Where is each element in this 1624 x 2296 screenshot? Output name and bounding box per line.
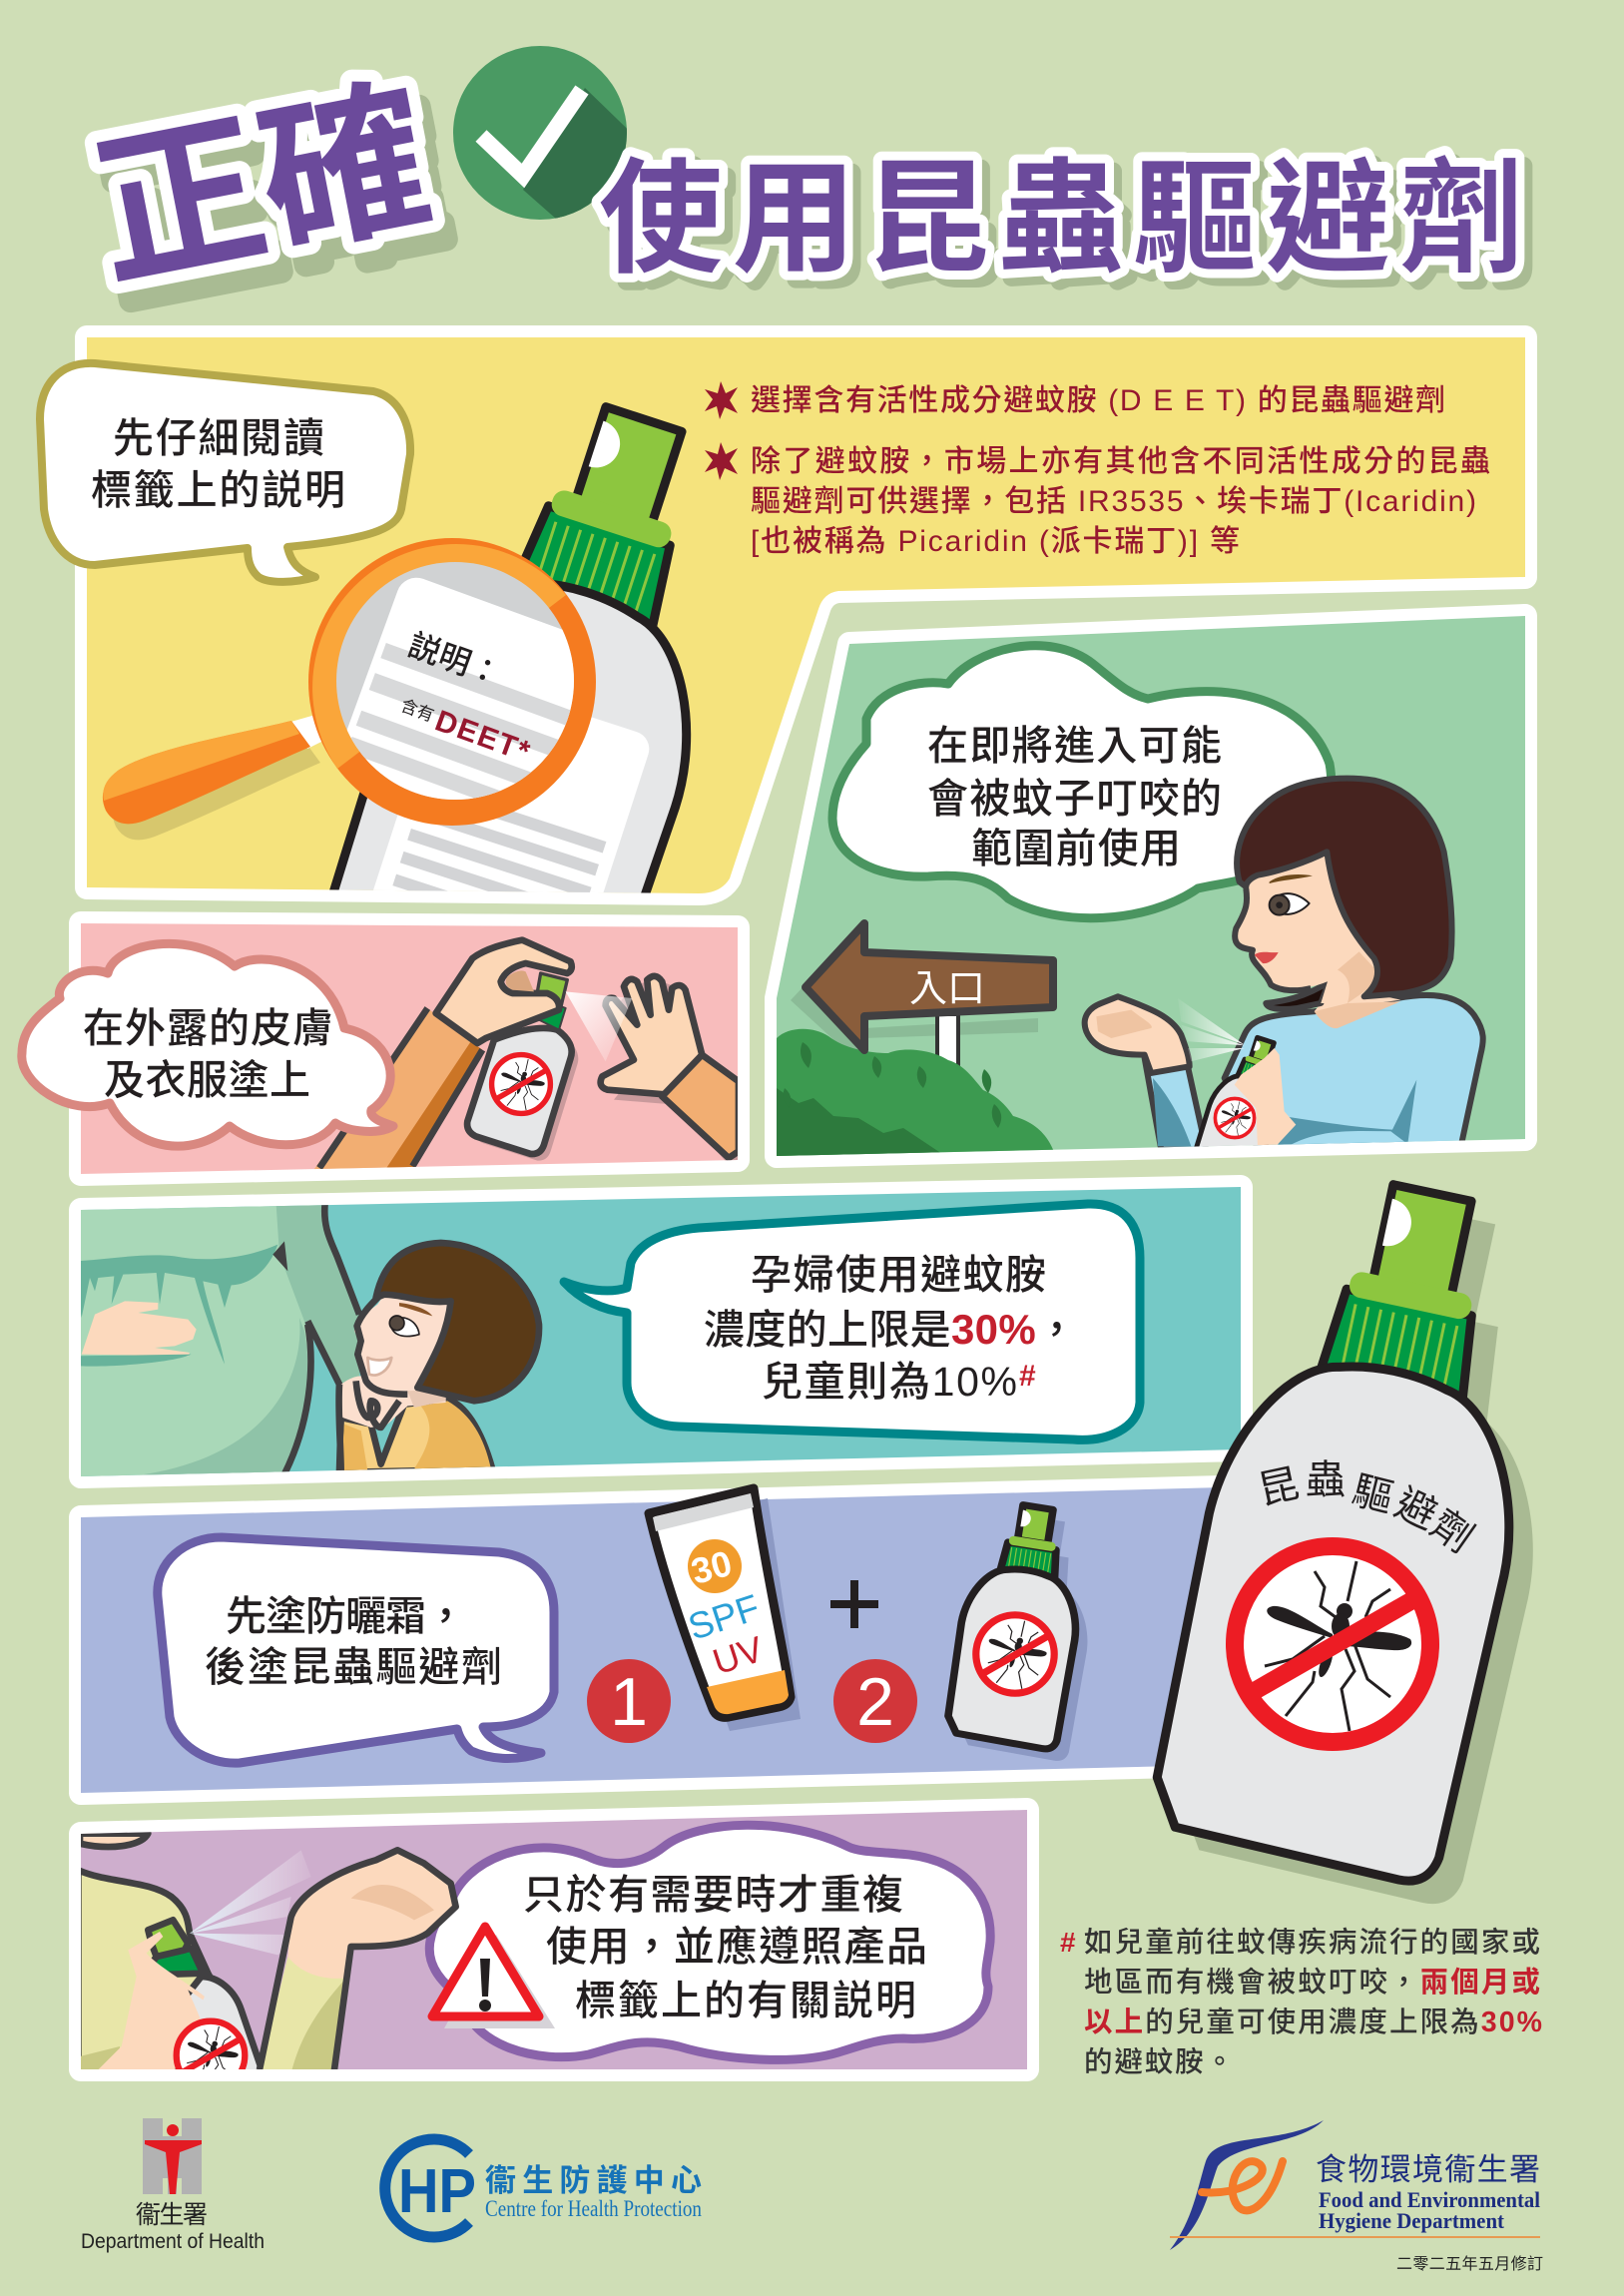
callout: use before entering: 在即將進入可能 — [927, 723, 1222, 769]
icon: large repellent bottle — [1143, 1161, 1603, 1911]
icon: plus sign — [830, 1580, 878, 1628]
icon: sunscreen tube: SPF — [684, 1586, 765, 1648]
logo: Food and Environmental Hygiene Department — [1170, 2120, 1540, 2250]
illustration: pregnant woman and child — [75, 1203, 539, 1477]
title: 使用昆蟲驅避劑: 使用昆蟲驅避劑 — [607, 159, 1531, 296]
illustration: entrance sign and bush — [777, 923, 1056, 1158]
callout: sunscreen first: 先塗防曬霜， — [226, 1593, 466, 1639]
label: bottle name: 蟲 — [1306, 1458, 1346, 1502]
badge: step 2 — [833, 1659, 917, 1743]
logo: Food and Environmental Hygiene Department: 食物環境衞生署 — [1316, 2152, 1540, 2187]
text block: active ingredients: 驅避劑可供選擇，包括 IR3535、埃卡瑞丁(Icaridin) — [751, 485, 1476, 518]
icon: sunscreen tube — [649, 1488, 801, 1731]
label: bottle name: 驅 — [1348, 1468, 1397, 1521]
label: 説明: 説明： — [403, 627, 506, 693]
label: 含有 DEET: 含有 — [398, 696, 436, 726]
icon: no mosquito sign — [1235, 1546, 1430, 1742]
callout: read the label: 先仔細閱讀 — [113, 415, 324, 461]
callout: sunscreen first: 後塗昆蟲驅避劑 — [205, 1644, 502, 1690]
logo: Centre for Health Protection: HP — [398, 2157, 476, 2226]
callout: use before entering: 會被蚊子叮咬的 — [927, 776, 1222, 822]
icon: sunscreen tube: 30 — [687, 1542, 736, 1592]
footnote: 的避蚊胺。 — [1084, 2046, 1234, 2078]
panel: apply on skin and clothes — [22, 923, 742, 1174]
callout: apply on skin and clothes: 及衣服塗上 — [104, 1057, 310, 1103]
logo: Centre for Health Protection: Centre for Health Protection — [485, 2196, 702, 2221]
callout: apply on skin and clothes — [22, 943, 393, 1146]
text block: active ingredients — [705, 381, 1490, 558]
callout: reapply only when needed: 使用，並應遵照產品 — [546, 1924, 927, 1970]
callout: concentration limit: 濃度的上限是30%， — [704, 1306, 1077, 1353]
callout: reapply only when needed: 只於有需要時才重複 — [523, 1872, 903, 1918]
footnote — [1060, 1927, 1542, 2078]
callout: concentration limit — [564, 1204, 1140, 1439]
panel: sunscreen first — [81, 1485, 1298, 1793]
icon: brown arrow sign — [806, 923, 1053, 1050]
footnote: 地區而有機會被蚊叮咬，兩個月或 — [1084, 1966, 1540, 1999]
footnote: 如兒童前往蚊傳疾病流行的國家或 — [1084, 1927, 1540, 1959]
text block: active ingredients: 選擇含有活性成分避蚊胺 (D E E T) 的昆蟲驅避劑 — [751, 384, 1445, 417]
icon: magnifying glass — [102, 538, 596, 826]
icon: brown arrow sign: 入口 — [909, 968, 985, 1010]
callout: reapply only when needed: 標籤上的有關説明 — [575, 1978, 916, 2023]
logo: Department of Health: 衞生署 — [136, 2201, 208, 2229]
title: 正確: 正確 — [80, 62, 445, 309]
icon: warning triangle — [432, 1927, 555, 2028]
logo: Department of Health — [81, 2118, 265, 2253]
illustration: woman spraying — [1085, 779, 1483, 1192]
label: bottle name: 避 — [1388, 1481, 1443, 1538]
logo: Centre for Health Protection — [385, 2139, 702, 2237]
badge: step 1: 1 — [610, 1664, 648, 1740]
icon: entrance post — [937, 1014, 958, 1074]
callout: concentration limit: 孕婦使用避蚊胺 — [751, 1252, 1046, 1298]
panel: pregnant women and children — [75, 1187, 1241, 1477]
callout: read the label — [40, 363, 410, 582]
footnote: 以上的兒童可使用濃度上限為30% — [1084, 2007, 1542, 2038]
logo: Centre for Health Protection: 衞生防護中心 — [485, 2163, 702, 2198]
callout: concentration limit: 兒童則為10% — [762, 1359, 1017, 1405]
text block: active ingredients: [也被稱為 Picaridin (派卡瑞丁)] 等 — [751, 525, 1240, 558]
label: bottle name — [1255, 1458, 1480, 1561]
illustration: hands and spray — [312, 940, 742, 1171]
illustration: spraying the wrist — [78, 1834, 456, 2089]
callout: read the label: 標籤上的説明 — [91, 467, 345, 513]
label: bottle name: 劑 — [1422, 1502, 1480, 1561]
callout: concentration limit: # — [1019, 1360, 1036, 1393]
panel: use before entering — [777, 616, 1525, 1192]
panel: read the label — [36, 325, 1537, 905]
label: 含有 DEET: DEET* — [431, 705, 534, 769]
footnote: # — [1060, 1927, 1076, 1958]
badge: step 2: 2 — [856, 1664, 894, 1740]
label: 含有 DEET — [395, 692, 534, 769]
label: bottle name: 昆 — [1255, 1462, 1303, 1513]
title: 正確: 正確 — [93, 81, 458, 328]
title: 使用昆蟲驅避劑: 使用昆蟲驅避劑 — [599, 151, 1523, 288]
icon: green check circle — [453, 46, 627, 220]
icon: bush — [777, 1029, 1056, 1158]
logo: Food and Environmental Hygiene Department: Hygiene Department — [1319, 2208, 1505, 2233]
panel: reapply only when needed — [78, 1810, 1027, 2089]
icon: small repellent bottle — [944, 1498, 1106, 1763]
badge: step 1 — [587, 1659, 671, 1743]
callout: use before entering: 範圍前使用 — [971, 826, 1181, 871]
icon: spray bottle with label — [113, 372, 787, 1136]
revision date: 二零二五年五月修訂 — [1396, 2255, 1543, 2273]
callout: sunscreen first — [158, 1537, 554, 1763]
callout: apply on skin and clothes: 在外露的皮膚 — [83, 1005, 333, 1051]
callout: use before entering — [832, 646, 1332, 918]
logo: Food and Environmental Hygiene Department: Food and Environmental — [1319, 2187, 1540, 2212]
logo: Department of Health: Department of Health — [81, 2230, 265, 2253]
callout: reapply only when needed — [429, 1825, 990, 2059]
icon: sunscreen tube: UV — [708, 1628, 768, 1682]
text block: active ingredients: 除了避蚊胺，市場上亦有其他含不同活性成分的昆蟲 — [751, 445, 1490, 478]
